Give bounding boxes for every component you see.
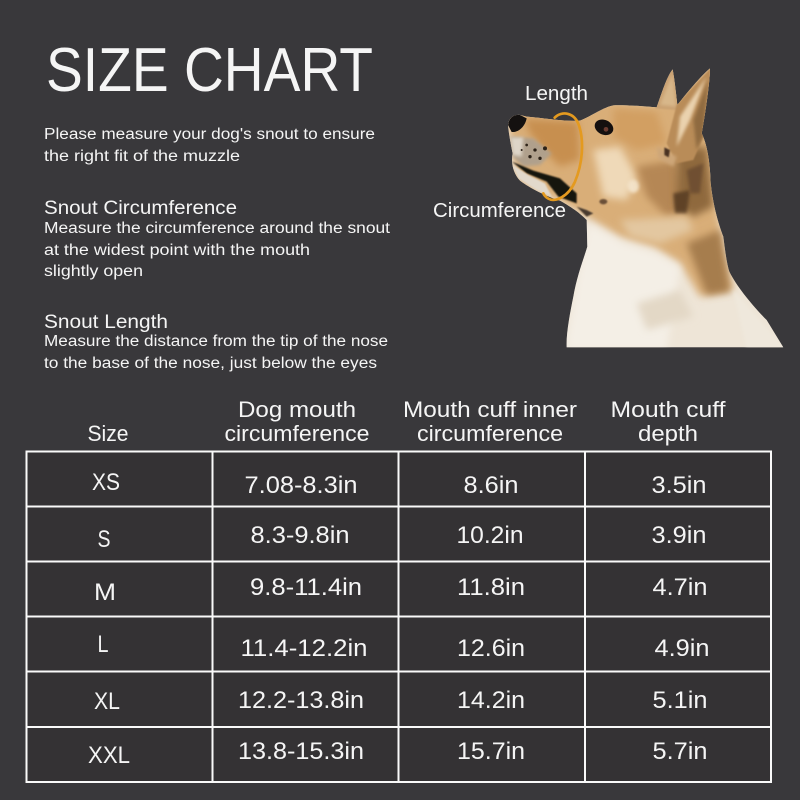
dog mouth circumference column: 9.8-11.4in xyxy=(250,574,362,601)
size column: XS xyxy=(92,469,120,496)
size column: S xyxy=(98,526,110,553)
far ear xyxy=(655,68,678,110)
snout length instructions: to the base of the nose, just below the eyes xyxy=(44,355,377,372)
table header: Dog mouth xyxy=(238,397,356,422)
table header: Mouth cuff xyxy=(610,397,726,422)
size column xyxy=(88,469,130,769)
mouth cuff depth column: 4.7in xyxy=(652,574,708,601)
label: circumference: Circumference xyxy=(433,200,566,222)
dog mouth circumference column: 12.2-13.8in xyxy=(238,687,364,714)
muzzle whisker patch xyxy=(511,137,552,167)
nose xyxy=(508,115,527,132)
muzzle measuring ring xyxy=(543,113,582,200)
throat mark xyxy=(599,199,607,204)
intro text: Please measure your dog's snout to ensure xyxy=(44,126,375,143)
table header xyxy=(88,397,726,446)
table header: Size xyxy=(88,421,128,446)
near ear xyxy=(667,67,712,163)
dog photo illustration xyxy=(500,63,793,350)
mouth cuff depth column: 3.9in xyxy=(652,522,706,549)
dark neck patches xyxy=(634,160,679,216)
dog mouth circumference column: 11.4-12.2in xyxy=(240,635,368,662)
eye xyxy=(594,120,614,136)
mouth cuff inner circumference column: 8.6in xyxy=(464,472,518,499)
mouth cuff depth column xyxy=(652,472,710,765)
mouth cuff depth column: 4.9in xyxy=(654,635,710,662)
intro text: the right fit of the muzzle xyxy=(44,148,240,165)
snout circumference instructions: Measure the circumference around the snout xyxy=(44,220,391,237)
size column: XL xyxy=(94,688,120,715)
mouth cuff depth column: 5.1in xyxy=(652,687,708,714)
cheek highlight xyxy=(593,147,637,200)
head fur xyxy=(507,63,733,297)
white chest xyxy=(565,223,680,350)
mouth cuff inner circumference column: 11.8in xyxy=(457,574,525,601)
size column: XXL xyxy=(88,742,130,769)
table header: circumference xyxy=(417,421,563,446)
snout circumference instructions: Snout Circumference xyxy=(44,198,237,219)
title: SIZE CHART xyxy=(46,36,373,105)
snout circumference instructions: at the widest point with the mouth xyxy=(44,242,310,259)
table grid xyxy=(26,451,771,782)
mouth cuff inner circumference column: 12.6in xyxy=(457,635,525,662)
table header: Mouth cuff inner xyxy=(403,397,577,422)
dog mouth circumference column: 7.08-8.3in xyxy=(244,472,358,499)
dog mouth circumference column: 13.8-15.3in xyxy=(238,738,364,765)
mouth cuff inner circumference column: 10.2in xyxy=(456,522,524,549)
snout length instructions: Measure the distance from the tip of the nose xyxy=(44,333,388,350)
mouth cuff inner circumference column xyxy=(456,472,525,765)
mouth cuff inner circumference column: 14.2in xyxy=(457,687,525,714)
mouth cuff depth column: 5.7in xyxy=(652,738,708,765)
snout length instructions xyxy=(44,312,388,372)
dog mouth circumference column xyxy=(238,472,368,765)
size column: M xyxy=(94,579,116,606)
intro text xyxy=(44,126,375,165)
dog mouth circumference column: 8.3-9.8in xyxy=(250,522,350,549)
label: length: Length xyxy=(525,83,588,105)
snout length instructions: Snout Length xyxy=(44,312,168,333)
mouth cuff inner circumference column: 15.7in xyxy=(457,738,525,765)
table header: circumference xyxy=(224,421,370,446)
mouth and lower lip xyxy=(512,162,577,203)
snout circumference instructions: slightly open xyxy=(44,263,143,280)
table header: depth xyxy=(638,421,698,446)
snout circumference instructions xyxy=(44,198,391,280)
size column: L xyxy=(98,631,108,658)
mouth cuff depth column: 3.5in xyxy=(652,472,706,499)
